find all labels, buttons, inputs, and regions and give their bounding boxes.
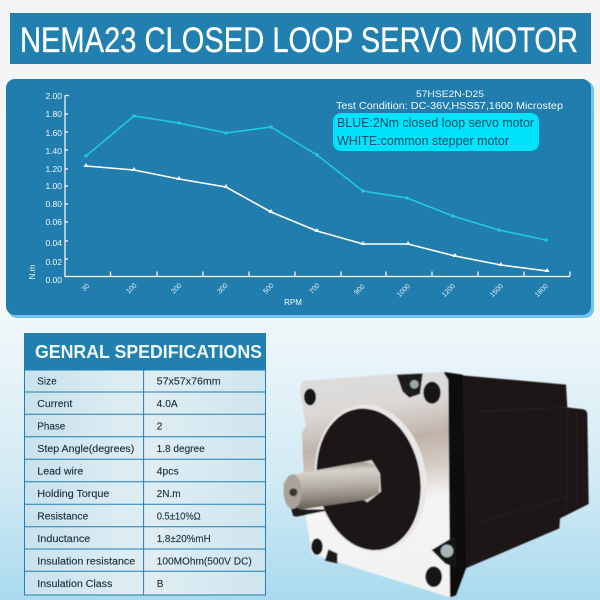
y axis labels: 0.80: [45, 199, 62, 209]
x axis labels: 30: [81, 283, 91, 293]
x axis labels: 700: [308, 282, 322, 296]
y axis labels: 2.00: [45, 91, 62, 101]
x axis labels: 500: [262, 282, 276, 296]
shaft end flat: [289, 503, 333, 517]
shaft collar: [355, 460, 381, 502]
icon: servo motor illustration: [283, 372, 589, 597]
legend: WHITE:common stepper motor: [337, 134, 509, 148]
spec values: B: [157, 579, 164, 590]
y axis labels: 0.00: [45, 275, 62, 285]
chart axes: [65, 96, 570, 276]
spec values: 0.5±10%Ω: [157, 512, 201, 522]
spec labels: Inductance: [37, 534, 91, 545]
y axis labels: 1.60: [45, 128, 62, 138]
shaft: [283, 462, 379, 510]
x axis title: RPM: [284, 298, 302, 307]
body panel lines: [477, 407, 577, 523]
y axis labels: 0.02: [45, 257, 62, 267]
flange notch: bottom screw: [325, 549, 337, 563]
y axis labels: 0.04: [45, 238, 62, 248]
spec labels: Current: [37, 399, 73, 410]
spec labels: Step Angle(degrees): [37, 444, 134, 455]
y axis title: N.m: [28, 264, 37, 279]
y axis labels: 1.00: [45, 181, 62, 191]
y axis labels: 0.06: [45, 217, 62, 227]
x axis labels: 1000: [396, 283, 412, 299]
spec values: 4pcs: [157, 466, 179, 478]
spec values: 1.8 degree: [157, 444, 205, 455]
motor body: [462, 375, 589, 569]
panel: torque chart: [6, 79, 594, 318]
spec labels: Resistance: [37, 512, 89, 522]
panel: general specifications table: [24, 333, 266, 595]
y axis labels: 1.20: [45, 164, 62, 174]
line: common stepper motor: [84, 163, 550, 272]
legend: [333, 113, 539, 151]
spec values: 4.0A: [157, 399, 178, 410]
black disc: [306, 400, 432, 558]
spec labels: Lead wire: [37, 466, 84, 478]
flange notch: right screw: [432, 536, 457, 568]
table grid: [24, 370, 266, 595]
spec labels: Insulation Class: [37, 579, 112, 590]
y axis labels: 1.40: [45, 146, 62, 156]
x axis labels: 100: [125, 282, 139, 296]
mounting holes: [304, 389, 316, 405]
spec values: 57x57x76mm: [157, 376, 221, 388]
x axis labels: [81, 282, 550, 299]
silver rim: [303, 396, 438, 561]
x axis labels: 200: [170, 282, 184, 296]
table heading: [24, 333, 266, 370]
spec values: 1.8±20%mH: [157, 534, 211, 545]
spec labels: Phase: [37, 422, 66, 432]
legend: BLUE:2Nm closed loop servo motor: [337, 116, 534, 130]
spec labels: Size: [37, 376, 57, 388]
spec labels: Holding Torque: [37, 489, 110, 500]
spec labels: Insulation resistance: [37, 556, 136, 568]
x axis labels: 900: [353, 283, 367, 297]
chart model text: 57HSE2N-D25: [416, 89, 484, 100]
x axis labels: 1800: [534, 283, 550, 299]
spec labels: [37, 376, 136, 590]
flange notch: top screw: [397, 373, 423, 398]
spec values: [157, 376, 252, 590]
x axis labels: 1200: [441, 283, 457, 299]
spec values: 100MOhm(500V DC): [157, 556, 252, 568]
silver flange plate: [300, 372, 450, 597]
black front bezel: [444, 372, 466, 597]
spec values: 2N.m: [157, 489, 181, 500]
x axis labels: 300: [216, 282, 230, 296]
x axis labels: 1500: [489, 283, 505, 299]
test condition text: Test Condition: DC-36V,HSS57,1600 Microstep: [336, 101, 563, 112]
spec values: 2: [157, 422, 163, 432]
shaft end face: [284, 474, 302, 509]
line: closed loop servo motor: [84, 114, 548, 242]
y axis labels: 1.80: [45, 109, 62, 119]
table heading: GENRAL SPEDIFICATIONS: [35, 341, 262, 362]
y axis labels: [45, 91, 62, 285]
